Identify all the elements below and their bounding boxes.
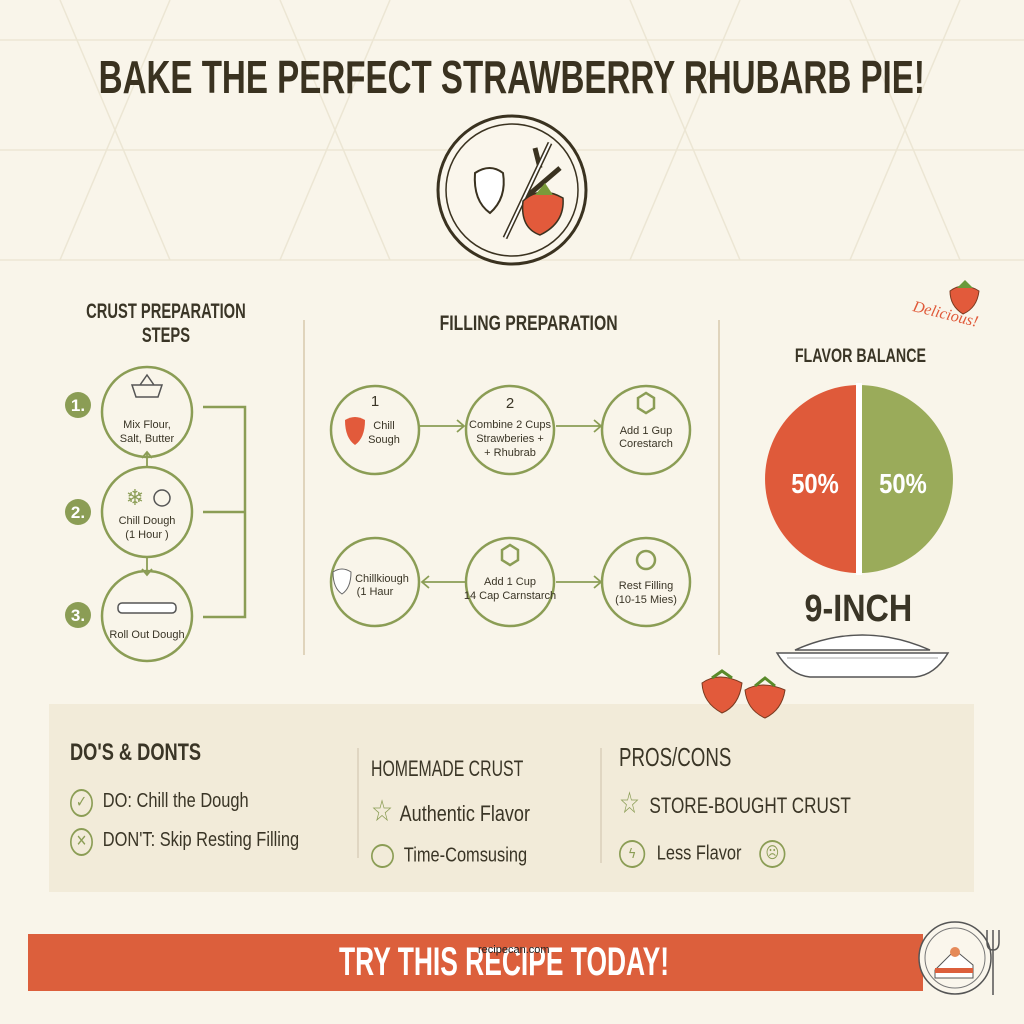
crust diagram: Chill Dough <box>119 515 175 527</box>
icon: pie plate <box>918 921 1000 995</box>
heading: crust <box>86 300 246 347</box>
banner: try this recipe: recipecan.com <box>478 944 550 956</box>
icon: strawberries <box>702 669 786 718</box>
filling diagram: Strawberies + <box>476 433 544 445</box>
callout: delicious: Delicious! <box>911 298 980 331</box>
filling diagram: Add 1 Gup <box>620 425 672 437</box>
filling diagram: Corestarch <box>619 438 673 450</box>
filling diagram: Chillkiough <box>355 573 409 585</box>
text: dos & donts: DON'T: Skip Resting Filling <box>103 829 299 851</box>
text: pros/cons: ☆ STORE-BOUGHT CRUST <box>619 787 851 820</box>
text: pros/cons: ϟ <box>629 845 635 862</box>
text: dos & donts <box>70 739 299 856</box>
filling diagram: Combine 2 Cups <box>469 419 551 431</box>
banner: try this recipe <box>28 934 923 991</box>
filling diagram: + Rhubrab <box>484 447 536 459</box>
crust diagram: (1 Hour ) <box>125 529 169 541</box>
filling diagram: Add 1 Cup <box>484 576 536 588</box>
text: homemade crust <box>371 756 530 868</box>
filling diagram: 1 <box>371 393 379 410</box>
text: dos & donts: DO'S & DONTS <box>70 739 201 766</box>
emblem: strawberries and rhubarb <box>436 114 588 266</box>
crust diagram: 1. <box>71 396 85 415</box>
filling diagram: Rest Filling <box>619 580 673 592</box>
icon: strawberry <box>950 280 980 314</box>
text: homemade crust: Time-Comsusing <box>404 844 527 866</box>
crust diagram: Salt, Butter <box>120 433 175 445</box>
pie chart <box>765 383 953 575</box>
text: pros/cons <box>619 742 851 868</box>
text: pros/cons: PROS/CONS <box>619 742 731 772</box>
filling diagram: Sough <box>368 434 400 446</box>
crust diagram <box>65 366 246 662</box>
heading: crust: CRUST PREPARATION <box>86 300 246 323</box>
filling diagram: (1 Haur <box>357 586 394 598</box>
icon: pie dish <box>776 634 950 678</box>
crust diagram: ❄ <box>126 485 144 510</box>
panel: tips <box>49 704 974 892</box>
filling diagram: Chill <box>373 420 395 432</box>
filling diagram: 14 Cap Carnstarch <box>464 590 556 602</box>
text: homemade crust: HOMEMADE CRUST <box>371 756 523 781</box>
title: BAKE THE PERFECT STRAWBERRY RHUBARB PIE! <box>99 51 925 103</box>
text: pros/cons: ☹ <box>765 845 779 862</box>
text: dos & donts: ✓ <box>76 794 87 811</box>
heading: filling: FILLING PREPARATION <box>440 312 618 335</box>
filling diagram <box>330 384 692 628</box>
banner: try this recipe: TRY THIS RECIPE TODAY! <box>339 940 669 984</box>
label: 9-inch: 9-INCH <box>804 588 912 630</box>
text: dos & donts: DO: Chill the Dough <box>103 790 249 812</box>
crust diagram: 3. <box>71 606 85 625</box>
heading: flavor balance: FLAVOR BALANCE <box>794 346 926 367</box>
text: pros/cons: Less Flavor <box>657 842 741 864</box>
crust diagram: 2. <box>71 503 85 522</box>
text: homemade crust: ☆ Authentic Flavor <box>371 795 530 828</box>
filling diagram: 2 <box>506 395 514 412</box>
crust diagram: Roll Out Dough <box>109 629 185 641</box>
pie chart: 50% <box>879 467 927 499</box>
text: dos & donts: ✕ <box>76 833 87 850</box>
crust diagram: Mix Flour, <box>123 419 171 431</box>
filling diagram: (10-15 Mies) <box>615 594 677 606</box>
pie chart: 50% <box>791 467 839 499</box>
heading: crust: STEPS <box>142 324 190 347</box>
